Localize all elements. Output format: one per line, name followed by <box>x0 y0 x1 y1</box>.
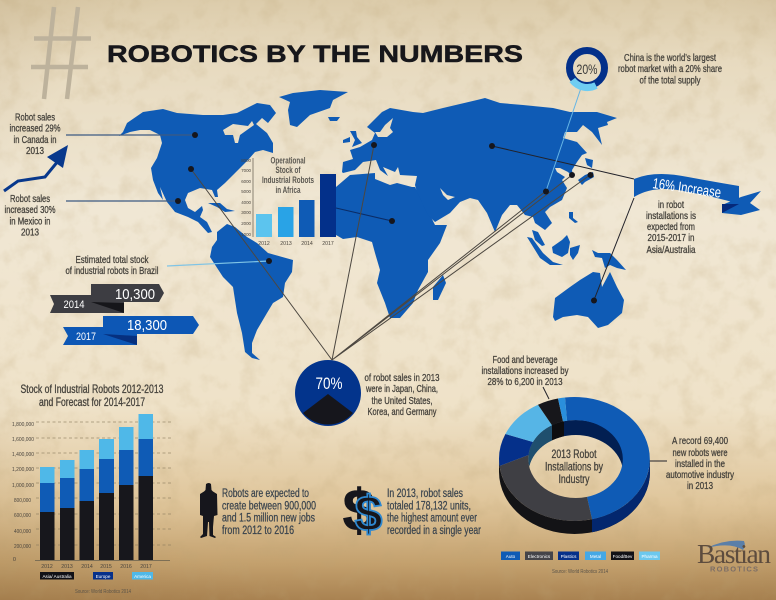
text: jobs: Robots are expected to <box>222 488 309 500</box>
text: jobs: from 2012 to 2016 <box>222 525 294 537</box>
map location dots <box>175 132 597 304</box>
africa chart title: Operational <box>270 156 306 166</box>
chart: 3d donut by industry <box>499 397 650 534</box>
africa chart axis labels <box>241 158 252 237</box>
africa chart axis labels: 5000 <box>241 189 252 194</box>
eurasia <box>342 98 617 232</box>
donut legend: Food/Bev <box>613 554 633 559</box>
text: robot sales total <box>387 488 481 537</box>
stock chart legend: America <box>134 574 151 579</box>
text: asia australia installs: expected from <box>647 221 695 233</box>
cuba <box>208 203 235 212</box>
text: canada sales: Robot sales <box>15 112 55 124</box>
ribbon: brazil 2014: 10,300 <box>115 286 155 303</box>
stock chart legend <box>40 572 153 580</box>
ribbon: brazil 2014 <box>50 284 164 313</box>
donut: china 20 percent <box>570 50 604 88</box>
text: jobs: create between 900,000 <box>222 500 316 512</box>
stock chart axis labels: 800,000 <box>14 498 31 504</box>
africa chart title: Industrial Robots <box>262 175 314 185</box>
text: asia australia installs: Asia/Australia <box>646 244 696 256</box>
stock chart years <box>41 564 152 570</box>
africa chart title <box>262 156 314 195</box>
text: canada sales <box>10 112 61 157</box>
title: ROBOTICS BY THE NUMBERS <box>107 41 523 68</box>
stock chart title <box>20 382 164 409</box>
ribbon: brazil 2017: 2017 <box>76 331 96 343</box>
stock chart years: 2015 <box>100 564 112 570</box>
donut legend: Metal <box>590 554 601 559</box>
ribbon: brazil 2017 <box>63 316 199 345</box>
text: mexico sales <box>4 193 56 238</box>
stacked bars <box>40 414 153 560</box>
africa chart title: Stock of <box>276 165 301 175</box>
stock chart years: 2017 <box>140 564 152 570</box>
africa chart bars <box>256 174 336 237</box>
segment: metal <box>505 405 552 442</box>
pie: 70 percent <box>295 360 361 426</box>
donut centre label: Industry <box>558 472 590 486</box>
africa chart axis labels: 7000 <box>241 168 252 173</box>
text: brazil stock: of industrial robots in Brazil <box>66 265 158 277</box>
stock chart axis labels <box>12 422 34 563</box>
ribbon: 16 percent increase: 16% Increase <box>651 175 722 202</box>
stock chart gridlines <box>36 422 171 545</box>
stock chart years: 2013 <box>61 564 73 570</box>
donut legend: Plastics <box>561 554 577 559</box>
segment: electronics <box>500 455 592 521</box>
text: automotive record: new robots were <box>672 447 728 459</box>
text: asia australia installs: 2015-2017 in <box>648 232 695 244</box>
stock chart source: Source: World Robotics 2014 <box>75 589 131 595</box>
text: china market: China is the world’s largest <box>624 52 716 64</box>
segment: food and beverage <box>538 398 563 425</box>
stock chart legend: Asia/ Australia <box>42 574 72 579</box>
text: food and beverage <box>482 354 569 388</box>
donut centre label: Installations by <box>545 460 603 474</box>
text: 70 percent sales: were in Japan, China, <box>365 383 438 395</box>
text: mexico sales: Robot sales <box>10 193 50 205</box>
donut centre label <box>545 447 603 486</box>
text: canada sales: 2013 <box>26 145 44 157</box>
segment: pharma <box>558 398 567 421</box>
africa chart axis labels: 6000 <box>241 179 252 184</box>
text: brazil stock <box>66 254 158 277</box>
africa chart years: 2012 <box>258 241 270 247</box>
text: china market <box>618 52 722 86</box>
leader lines <box>66 88 667 461</box>
uk and ireland <box>343 131 362 147</box>
text: mexico sales: in Mexico in <box>10 216 51 228</box>
stock chart years: 2012 <box>41 564 53 570</box>
icon: businessman <box>200 483 218 538</box>
text: 70 percent sales: the United States, <box>372 395 432 407</box>
stock chart title: Stock of Industrial Robots 2012-2013 <box>20 382 164 396</box>
africa chart years: 2013 <box>280 241 292 247</box>
stock chart axis labels: 1,600,000 <box>12 437 34 443</box>
text: automotive record: installed in the <box>675 458 725 470</box>
logo: bastian robotics: Bastian <box>697 538 771 569</box>
text: canada sales: in Canada in <box>14 134 57 146</box>
text: automotive record <box>666 435 735 492</box>
donut legend: Auto <box>506 554 516 559</box>
text: 70 percent sales: of robot sales in 2013 <box>364 372 440 384</box>
north america <box>119 103 276 233</box>
icon: dollar sign: $ <box>343 478 375 543</box>
ribbon: brazil 2017: 18,300 <box>127 317 167 334</box>
text: food and beverage: installations increased by <box>482 365 569 377</box>
africa chart years: 2017 <box>322 241 334 247</box>
stock chart axis labels: 1,200,000 <box>12 467 34 473</box>
text: automotive record: in 2013 <box>687 480 713 492</box>
text: canada sales: increased 29% <box>10 122 61 134</box>
text: 70 percent sales: Korea, and Germany <box>368 406 437 418</box>
stock chart axis labels: 0 <box>13 557 16 563</box>
africa chart axis labels: 8000 <box>241 158 252 163</box>
segment: automotive <box>565 397 650 519</box>
text: food and beverage: Food and beverage <box>492 354 558 366</box>
stock chart axis labels: 400,000 <box>14 529 31 535</box>
icon: dollar sign: $ <box>355 486 383 542</box>
africa chart axis labels: 1000 <box>241 232 252 237</box>
text: jobs <box>222 488 316 537</box>
text: robot sales total: totaled 178,132 units, <box>387 500 471 512</box>
africa chart title: in Africa <box>276 185 301 195</box>
text: asia australia installs <box>646 199 696 256</box>
text: mexico sales: 2013 <box>21 226 39 238</box>
ribbon: brazil 2014: 2014 <box>64 299 84 311</box>
donut extrusion <box>499 459 650 534</box>
text: china market: of the total supply <box>640 74 701 86</box>
donut: china 20 percent: 20% <box>576 61 598 77</box>
africa chart years: 2014 <box>301 241 313 247</box>
stock chart title: and Forecast for 2014-2017 <box>39 395 145 409</box>
text: automotive record: automotive industry <box>666 469 735 481</box>
stock chart axis labels: 200,000 <box>14 544 31 550</box>
africa chart axis labels: 3000 <box>241 210 252 215</box>
text: china market: robot market with a 20% share <box>618 63 722 75</box>
segment: plastics <box>499 434 533 466</box>
donut inner wall <box>528 420 623 466</box>
madagascar <box>433 275 446 300</box>
donut legend <box>501 552 660 560</box>
text: automotive record: A record 69,400 <box>672 435 728 447</box>
logo: bastian robotics: ROBOTICS <box>710 564 758 574</box>
donut legend: Electronics <box>528 554 551 559</box>
stock chart legend: Europe <box>96 574 111 579</box>
hash symbol <box>31 7 91 99</box>
donut centre label: 2013 Robot <box>552 447 597 461</box>
africa chart axis labels: 2000 <box>241 221 252 226</box>
asia pacific islands <box>527 158 626 270</box>
text: jobs: and 1.5 million new jobs <box>222 512 315 524</box>
chart: operational stock in africa <box>241 156 336 247</box>
text: food and beverage: 28% to 6,200 in 2013 <box>488 376 563 388</box>
icon: rising arrow <box>4 145 68 191</box>
text: asia australia installs: in robot <box>658 199 684 211</box>
stock chart axis labels: 1,800,000 <box>12 422 34 428</box>
text: robot sales total: the highest amount ever <box>387 512 477 524</box>
south america <box>210 224 293 360</box>
donut legend: Pharma <box>641 554 658 559</box>
stock chart years: 2016 <box>120 564 132 570</box>
stock chart axis labels: 1,400,000 <box>12 452 34 458</box>
africa chart axis labels: 4000 <box>241 200 252 205</box>
text: asia australia installs: installations is <box>646 210 696 222</box>
donut source: Source: World Robotics 2014 <box>552 569 608 575</box>
ribbon: 16 percent increase <box>634 174 761 215</box>
greenland and iceland <box>279 90 348 127</box>
text: mexico sales: increased 30% <box>4 204 56 216</box>
text: brazil stock: Estimated total stock <box>76 254 149 266</box>
africa chart years <box>258 241 334 247</box>
stock chart axis labels: 600,000 <box>14 513 31 519</box>
chart: stock of industrial robots <box>12 382 171 595</box>
text: robot sales total: recorded in a single year <box>387 525 481 537</box>
stock chart axis labels: 1,000,000 <box>12 483 34 489</box>
pie: 70 percent: 70% <box>316 374 342 393</box>
stock chart years: 2014 <box>81 564 93 570</box>
australia <box>553 272 624 328</box>
africa <box>336 173 447 318</box>
text: robot sales total: In 2013, robot sales <box>387 488 463 500</box>
world map <box>119 90 626 360</box>
text: 70 percent sales <box>364 372 440 418</box>
